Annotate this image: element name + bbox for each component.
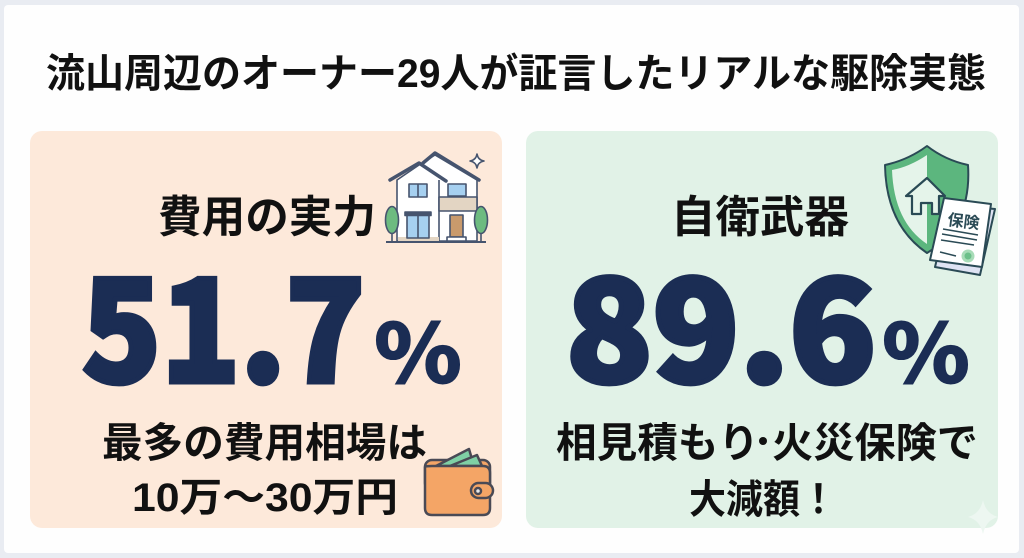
title: 流山周辺のオーナー29人が証言したリアルな駆除実態 — [46, 52, 986, 96]
panel: cost: 10万～30万円 — [132, 476, 398, 520]
panel heading: self defense: 自衛武器 — [671, 193, 849, 242]
icon: shield and insurance document: 保険 — [947, 211, 980, 233]
icon: sparkle watermark — [968, 500, 998, 534]
caption: savings — [556, 420, 978, 466]
big number: 89.6%: 89.6 — [566, 222, 876, 423]
icon: shield and insurance document — [885, 146, 995, 275]
percent sign: % — [882, 288, 970, 407]
icon: house — [386, 153, 488, 242]
caption: big reduction: 大減額！ — [689, 478, 837, 522]
icon: wallet — [425, 449, 493, 515]
panel: self defense — [526, 131, 998, 534]
panel heading: cost: 費用の実力 — [158, 193, 376, 242]
panel: cost — [30, 131, 502, 528]
caption: savings: 相見積もり — [556, 420, 759, 466]
caption: cost range: 最多の費用相場は — [102, 420, 427, 466]
percent sign: % — [374, 288, 462, 407]
big number: 51.7%: 51.7 — [82, 222, 365, 423]
caption: savings: 火災保険で — [772, 420, 978, 466]
